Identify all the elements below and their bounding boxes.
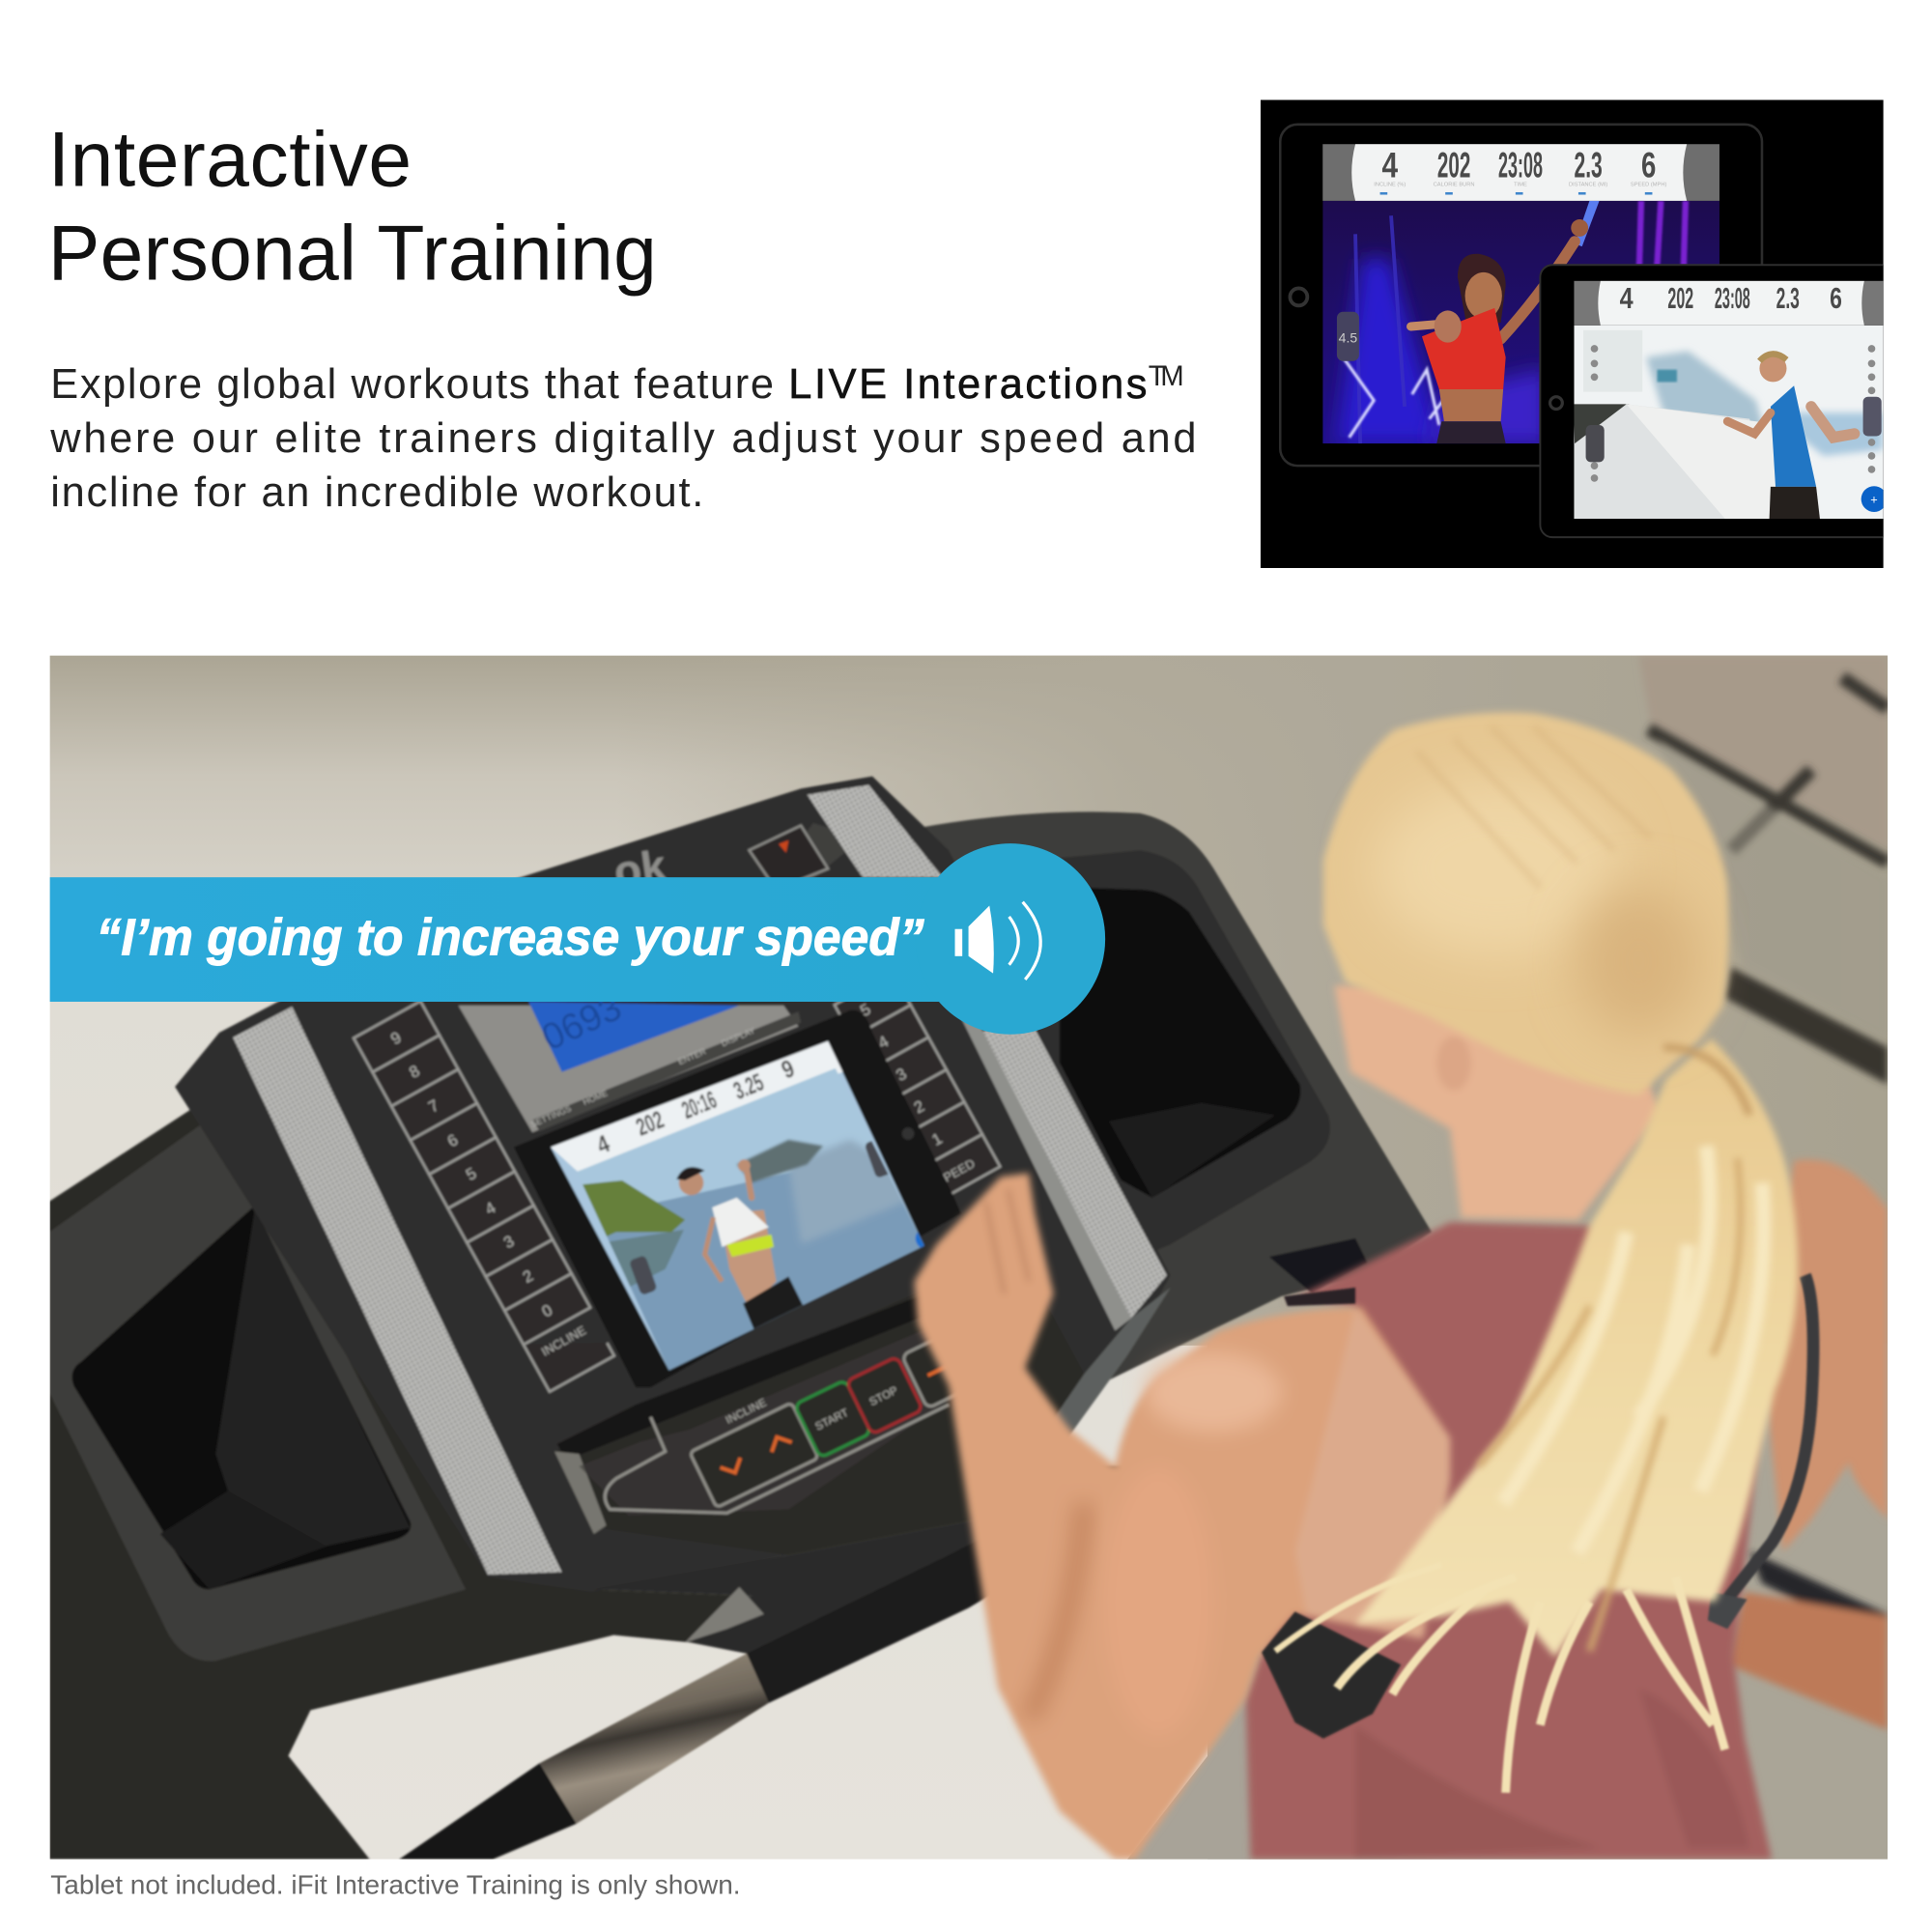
footnote: Tablet not included. iFit Interactive Training is only shown. [50, 1869, 741, 1899]
right button strip: 2 [911, 1096, 927, 1117]
left button strip: 8 [406, 1062, 423, 1082]
right button strip: 1 [928, 1129, 946, 1150]
console labels: ENTER [677, 1046, 708, 1066]
large tablet: CALORIE BURN [1434, 183, 1475, 188]
large tablet: DISTANCE (MI) [1569, 183, 1607, 188]
small tablet [1539, 264, 1884, 539]
body text: TM [1149, 360, 1184, 392]
small tablet: 23:08 [1715, 282, 1750, 315]
large tablet: TIME [1514, 183, 1527, 188]
left button strip: 5 [463, 1164, 479, 1184]
right arm and back [1727, 1159, 1888, 1730]
small tablet: 2.3 [1776, 282, 1800, 315]
tablet on console: 20:16 [678, 1087, 721, 1124]
left button strip: 7 [425, 1095, 441, 1117]
left frame and cup holder [49, 1082, 752, 1860]
console labels: HOME [582, 1088, 609, 1107]
body text: where our elite trainers digitally adjust your speed and [49, 415, 1197, 462]
treadmill [49, 777, 1432, 1860]
right button strip: 4 [875, 1032, 892, 1052]
bra [1262, 1275, 1813, 1739]
large tablet: 6 [1641, 146, 1656, 185]
title: Personal Training [48, 211, 657, 298]
small tablet: + [1870, 493, 1878, 507]
left button strip [354, 1001, 616, 1392]
safety key [912, 1543, 971, 1605]
body text: Explore global workouts that feature [50, 361, 774, 408]
console labels [529, 1026, 756, 1129]
handlebar [399, 1466, 1133, 1860]
left button strip: 3 [500, 1232, 517, 1252]
lower control panel: INCLINE [724, 1397, 769, 1427]
large tablet: INCLINE (%) [1374, 183, 1406, 188]
tank top [1246, 1222, 1772, 1860]
icon: speaker [955, 902, 1040, 980]
left button strip: INCLINE [539, 1322, 588, 1359]
large tablet: 2.3 [1574, 146, 1603, 185]
lower control panel: STOP [867, 1385, 900, 1408]
left button strip: 6 [444, 1130, 461, 1151]
right button strip: SPEED [934, 1156, 978, 1189]
console body: ok [611, 839, 669, 896]
left button strip: 2 [520, 1266, 536, 1287]
large tablet: SPEED (MPH) [1631, 183, 1666, 188]
panel: tablets with app screens [1261, 99, 1932, 568]
right button strip [832, 1002, 1003, 1196]
hair [1275, 713, 1798, 1793]
small tablet: 6 [1830, 282, 1842, 315]
callout banner [50, 843, 1105, 1035]
console labels: SETTINGS [529, 1103, 573, 1129]
title [48, 117, 657, 298]
large tablet: 23:08 [1498, 146, 1543, 185]
woman [914, 713, 1888, 1860]
tablet on console: 9 [778, 1055, 798, 1085]
lower control panel [554, 1297, 1083, 1555]
small tablet: 4 [1620, 282, 1634, 315]
tablet on console [514, 1010, 961, 1392]
left button strip: 0 [539, 1300, 555, 1321]
lower control panel: START [813, 1407, 850, 1434]
quote text: “I’m going to increase your speed” [96, 910, 924, 967]
left button strip: 9 [387, 1028, 405, 1048]
tablet on console: 3.25 [730, 1069, 768, 1105]
right cup holder [918, 811, 1432, 1380]
console labels: DISPLAY [720, 1026, 756, 1048]
body text: LIVE Interactions [788, 361, 1147, 408]
large tablet: 4.5 [1339, 330, 1357, 346]
arm and shoulder [914, 1173, 1450, 1860]
title: Interactive [48, 117, 412, 204]
large tablet: 4 [1381, 146, 1398, 185]
large tablet: 202 [1437, 146, 1470, 185]
console body [175, 777, 1171, 1592]
neck and face [1334, 985, 1661, 1220]
room background [49, 656, 1888, 1860]
right button strip: 5 [857, 1000, 873, 1020]
tablet on console: 202 [633, 1106, 668, 1142]
large tablet [1280, 125, 1762, 466]
left button strip: 4 [482, 1198, 498, 1219]
console body: 0693 [536, 986, 628, 1059]
body text: incline for an incredible workout. [50, 469, 703, 516]
body text [49, 360, 1197, 516]
right button strip: 3 [893, 1065, 910, 1085]
tablet on console: 4 [593, 1130, 614, 1159]
small tablet: 202 [1667, 282, 1693, 315]
photo: woman on treadmill [49, 656, 1888, 1860]
